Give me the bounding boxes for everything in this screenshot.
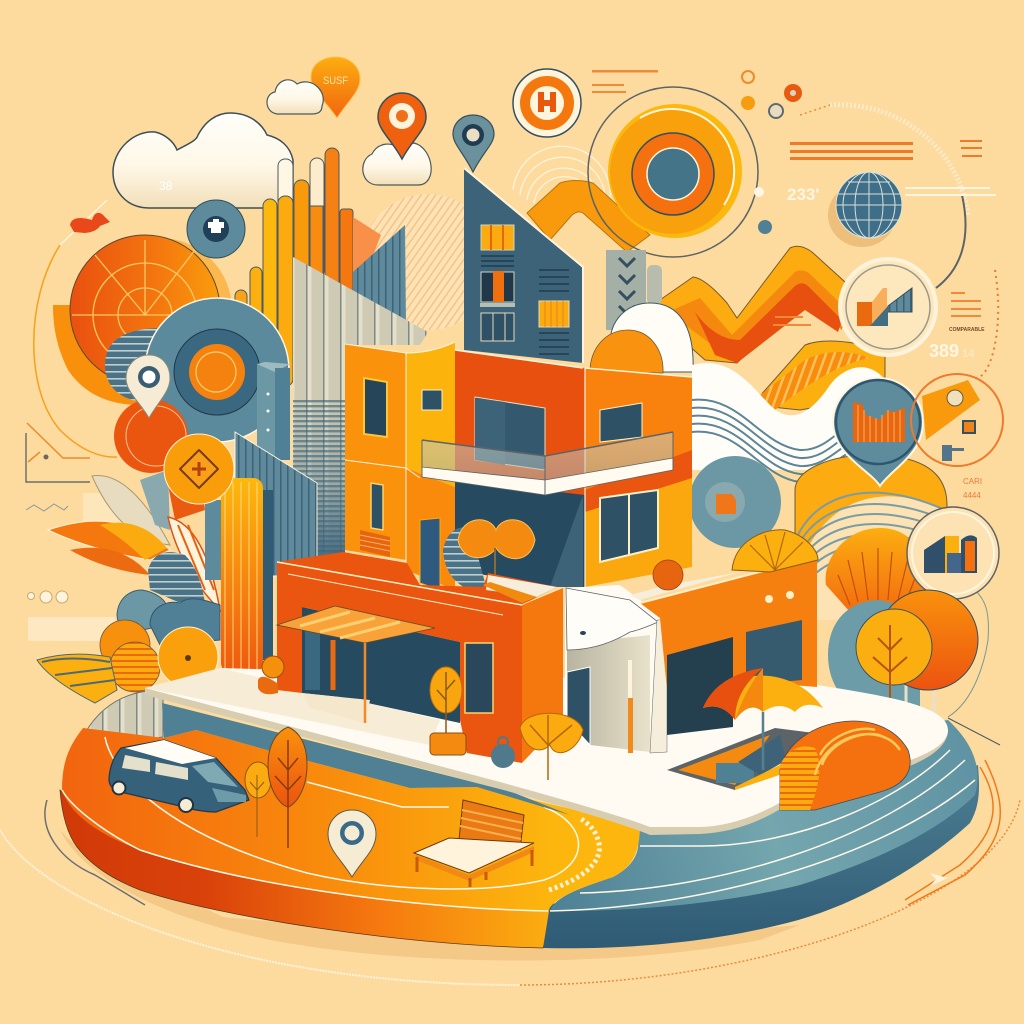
upper window xyxy=(481,225,514,250)
dark void under balcony xyxy=(455,480,585,587)
white terrace slab xyxy=(145,668,948,835)
blue striped shrub with orange leaf xyxy=(443,520,535,590)
orange upper left block xyxy=(345,342,455,590)
red middle block xyxy=(455,350,585,587)
number label 233: 233' xyxy=(787,185,819,204)
white location pin left xyxy=(126,355,170,418)
round orange badge icon xyxy=(513,69,581,137)
orange cylinder tower xyxy=(221,478,263,673)
small top cloud xyxy=(267,80,323,114)
orange right wall xyxy=(585,368,692,587)
orange sunburst disc xyxy=(826,528,931,620)
yellow arch xyxy=(752,341,885,410)
cloud label: 38 xyxy=(159,179,173,193)
striped awning xyxy=(277,606,435,723)
small line chart left xyxy=(26,423,90,511)
ring with chart lower right xyxy=(907,507,999,599)
entrance porch xyxy=(565,585,668,755)
pale dashes left xyxy=(28,617,115,641)
window slats xyxy=(481,256,569,354)
arrow marker on blue base xyxy=(930,873,948,886)
blue icon badge top xyxy=(187,200,245,258)
right window top xyxy=(600,403,642,442)
small text lines top centre xyxy=(592,70,658,93)
target circle graphic xyxy=(588,87,764,257)
wing door left xyxy=(667,637,733,735)
roof inner cream xyxy=(277,552,557,605)
cloud under orange pin xyxy=(363,143,431,185)
car xyxy=(109,740,249,812)
middle window xyxy=(480,271,515,307)
white bar and dotted arc xyxy=(800,105,998,378)
side window xyxy=(539,301,569,327)
upper glazed door xyxy=(475,397,545,470)
front beam and posts xyxy=(277,562,522,763)
red ball xyxy=(114,399,188,473)
lower window with stair xyxy=(371,483,383,530)
yellow pin with label xyxy=(311,57,360,118)
lower red building xyxy=(277,552,563,763)
zigzag ribbon right xyxy=(657,246,845,363)
orange striped mound xyxy=(780,721,910,810)
tall dark blue house xyxy=(464,168,583,363)
lower window xyxy=(481,313,514,341)
opening shadow xyxy=(302,607,460,723)
lower leaves left xyxy=(37,654,163,740)
blue disc with orange icon xyxy=(689,456,781,548)
blue location pin xyxy=(453,115,494,172)
blue circle with orange core xyxy=(105,298,289,442)
small grey tower xyxy=(257,362,290,460)
orange fruits xyxy=(100,620,218,692)
circular base platform xyxy=(60,720,979,948)
base side blue xyxy=(543,765,979,948)
blue foliage xyxy=(117,490,273,660)
small orange lines beside ring xyxy=(773,292,981,326)
interior column xyxy=(305,625,320,690)
wing door right xyxy=(746,620,802,685)
tiny orange text xyxy=(963,477,982,500)
translucent orange halo behind radar xyxy=(88,238,232,382)
orbit lines around the base xyxy=(0,590,1020,985)
small tree by car xyxy=(245,762,271,837)
small flower pot left xyxy=(258,656,284,694)
small caption: COMPARABLE xyxy=(949,327,985,333)
orange location pin xyxy=(378,93,426,159)
base top orange xyxy=(62,728,640,911)
tiny orange text: 4444 xyxy=(963,491,981,500)
white wave with blue stripes xyxy=(692,363,885,482)
side wall xyxy=(522,588,563,763)
grey striped building xyxy=(293,257,428,560)
ribbon behind the target xyxy=(527,180,650,252)
tall autumn tree xyxy=(268,727,307,848)
white thin arc and bird area left xyxy=(34,200,117,457)
hills behind the house xyxy=(590,303,693,373)
pool with furniture xyxy=(667,728,830,790)
blue band under the terrace xyxy=(162,703,570,815)
big cloud xyxy=(113,113,293,208)
striped arcs xyxy=(790,493,945,620)
small tree in pot xyxy=(430,667,466,755)
right trees group xyxy=(828,590,978,715)
tiny orange text: CARI xyxy=(963,477,982,486)
right window bottom xyxy=(600,490,658,562)
orange radar disc xyxy=(70,235,220,385)
blue striped block xyxy=(235,432,317,576)
orange heading lines xyxy=(790,140,982,160)
leaf fan left xyxy=(48,470,220,610)
small dots left xyxy=(28,591,68,603)
orange ball with plus icon xyxy=(164,434,234,504)
ring with icons upper right xyxy=(911,374,1003,466)
location pin on base xyxy=(328,810,376,877)
parasol xyxy=(703,668,823,770)
red small bird icon xyxy=(70,213,110,233)
right wing orange building xyxy=(630,557,817,735)
ring with chart xyxy=(840,259,936,355)
hatched sun disc behind the tall house xyxy=(360,194,496,330)
shell fan shrub xyxy=(732,530,818,572)
base top blue xyxy=(550,720,978,911)
window upper left xyxy=(364,378,387,437)
small floating dots xyxy=(741,71,802,234)
location pin with bar chart xyxy=(833,378,923,486)
grey kettlebell object xyxy=(491,737,515,768)
number label 389: 389 14 xyxy=(929,341,975,361)
grey slatted panel xyxy=(353,225,406,326)
orange half panel xyxy=(53,305,140,405)
wooden bench xyxy=(414,800,534,887)
top edge highlight xyxy=(277,562,563,605)
orange hatched fragment xyxy=(353,217,381,275)
globe icon xyxy=(828,172,902,247)
yellow fan tree xyxy=(520,713,583,780)
bar columns xyxy=(235,148,353,386)
orange dome right xyxy=(795,455,947,560)
round pot on wing xyxy=(653,560,683,590)
door lower tower xyxy=(420,518,440,590)
white concentric arcs xyxy=(513,146,610,212)
interior floor xyxy=(302,693,370,723)
small window xyxy=(422,390,442,410)
striped tower with chevrons xyxy=(606,250,662,330)
white track lines xyxy=(62,737,975,911)
base side orange xyxy=(60,790,560,948)
balcony xyxy=(422,432,673,495)
pin label: SUSF xyxy=(323,75,348,87)
striped orange arch detail xyxy=(760,352,870,410)
